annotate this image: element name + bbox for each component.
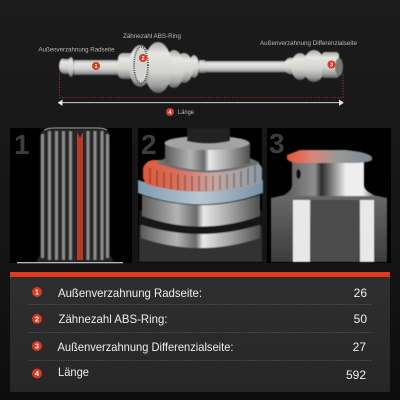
hexagon body bbox=[271, 193, 387, 262]
row 4: 4 bbox=[35, 369, 40, 378]
shaft: centre hub and boot bbox=[118, 42, 205, 93]
shaft: differential joint bbox=[284, 50, 343, 82]
row 1 bbox=[32, 286, 367, 300]
marker 1 bbox=[92, 62, 100, 70]
spline body bbox=[36, 129, 114, 262]
row 3: Außenverzahnung Differenzialseite: bbox=[58, 340, 234, 354]
clamp band bbox=[141, 223, 260, 248]
top thread bbox=[187, 128, 230, 144]
row 1: 26 bbox=[354, 286, 367, 300]
red highlighted tooth bbox=[77, 132, 83, 260]
panel number 3: 3 bbox=[269, 128, 285, 159]
panel number 1: 1 bbox=[14, 129, 30, 160]
row 1: 1 bbox=[35, 288, 39, 297]
top flange bbox=[287, 150, 372, 163]
base highlight bbox=[17, 262, 123, 263]
row 4: 592 bbox=[346, 368, 366, 382]
row 3 bbox=[32, 340, 366, 354]
panel 3: differential side photo bbox=[267, 128, 391, 263]
hex bright facets bbox=[293, 200, 374, 262]
arrow: length bbox=[58, 100, 343, 105]
row 4 bbox=[32, 365, 366, 382]
ABS tooth ring bbox=[143, 160, 262, 192]
marker 4 and Länge label: 4 bbox=[168, 110, 172, 116]
specification table bbox=[10, 272, 390, 392]
row 2: 50 bbox=[354, 312, 367, 326]
marker 4 and Länge label: Länge bbox=[178, 109, 195, 116]
neck bbox=[282, 162, 376, 196]
row 4: Länge bbox=[58, 365, 89, 379]
label: Außenverzahnung Differenzialseite: Außenverzahnung Differenzialseite bbox=[260, 40, 358, 47]
row 2: 2 bbox=[35, 315, 39, 324]
ABS ring bbox=[134, 47, 148, 83]
panel 2: ABS ring photo bbox=[138, 128, 263, 263]
machined collar bbox=[142, 195, 260, 226]
marker 3 bbox=[328, 60, 336, 68]
marker 3: 3 bbox=[330, 62, 333, 68]
row 3: 27 bbox=[353, 340, 366, 354]
blue ring bbox=[138, 180, 263, 204]
panel 1: spline photo bbox=[10, 128, 132, 263]
shaft: middle bar bbox=[203, 61, 287, 72]
row 2 bbox=[32, 312, 367, 326]
oil hole bbox=[296, 169, 301, 179]
lower boot bbox=[139, 225, 262, 262]
marker 2 bbox=[139, 54, 147, 62]
marker 2: 2 bbox=[141, 56, 145, 62]
shaft: wheel-side spline bbox=[59, 57, 122, 77]
row 1: Außenverzahnung Radseite: bbox=[58, 286, 202, 300]
spline top band bbox=[44, 128, 107, 130]
label: Außenverzahnung Radseite: Außenverzahnung Radseite bbox=[38, 46, 115, 54]
red header bar bbox=[10, 272, 390, 277]
dark seal bbox=[139, 210, 262, 234]
top bearing surface bbox=[156, 153, 260, 172]
centre cylinder bbox=[165, 143, 250, 170]
marker 4 and Länge label bbox=[166, 108, 195, 116]
row 3: 3 bbox=[35, 342, 39, 351]
hex centre facet bbox=[311, 200, 359, 262]
table panel bbox=[10, 272, 390, 392]
dotted length bracket bbox=[60, 73, 343, 98]
drive shaft diagram bbox=[58, 42, 343, 105]
label: Zähnezahl ABS-Ring: Zähnezahl ABS-Ring bbox=[123, 33, 182, 40]
spline teeth bbox=[42, 131, 108, 260]
row 2: Zähnezahl ABS-Ring: bbox=[58, 312, 168, 326]
panel number 2: 2 bbox=[141, 129, 157, 160]
marker 1: 1 bbox=[94, 64, 98, 70]
